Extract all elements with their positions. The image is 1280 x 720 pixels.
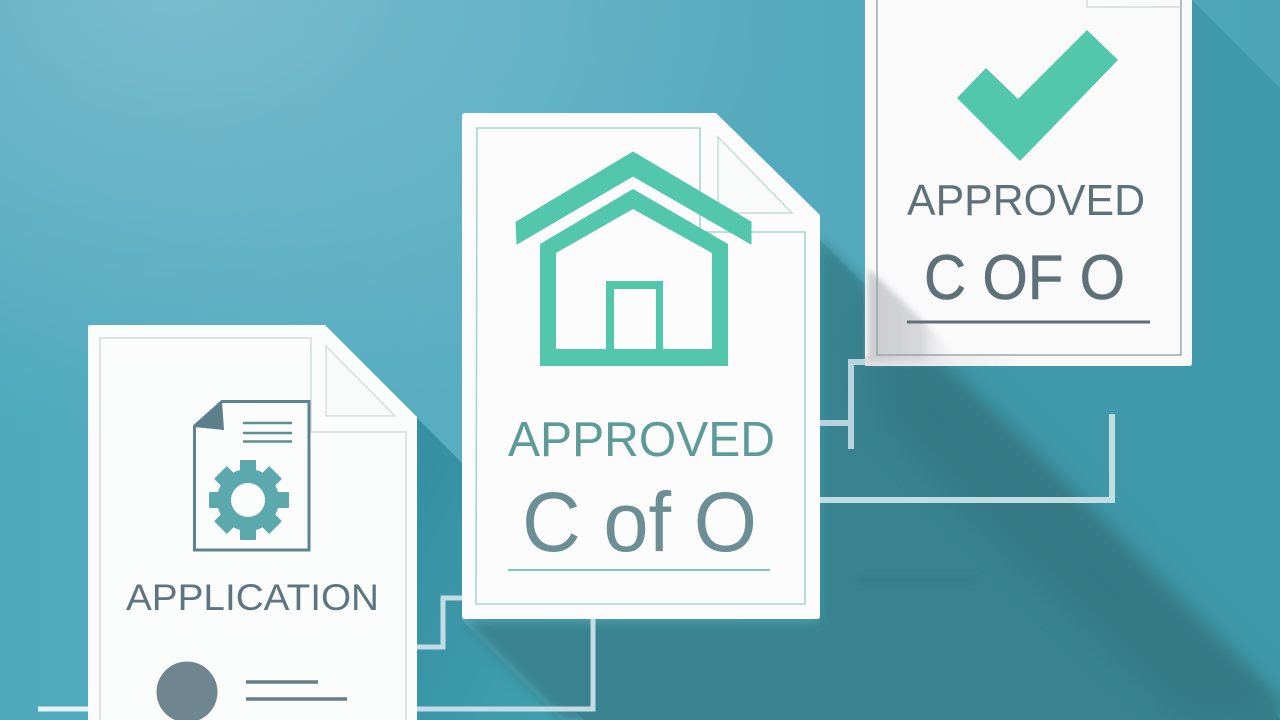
connector: C of O to approved step (818, 362, 868, 449)
connector: C of O to approved lower bracket (818, 414, 1112, 500)
bottom strip tint (865, 356, 1015, 366)
document sheet (865, 0, 1192, 366)
gear (209, 460, 289, 540)
long shadow of application document (417, 418, 562, 720)
faint smudge text on shadow (858, 576, 976, 585)
detail lines (246, 682, 347, 699)
small page outline (194, 402, 309, 550)
icon: check mark (957, 30, 1118, 161)
label: approved: APPROVED (907, 176, 1145, 225)
document sheet (88, 325, 417, 720)
label: C of O: C of O (522, 475, 757, 569)
label: approved: APPROVED (508, 413, 775, 467)
inner border (100, 338, 406, 720)
small page fold (194, 401, 224, 430)
folded corner (718, 137, 792, 213)
icon: profile circle (156, 662, 218, 720)
folded corner stub (1087, 0, 1181, 7)
underline (508, 569, 770, 571)
connector: left lead-in line (38, 706, 90, 712)
icon: document with gear (194, 401, 309, 550)
connector: application to C of O step (415, 598, 465, 647)
folded corner (326, 346, 395, 416)
icon: house (516, 152, 751, 366)
connector: application to C of O lower bracket (415, 615, 593, 709)
label: application: APPLICATION (126, 577, 379, 618)
shadow falling on sheet (868, 268, 962, 362)
inner border (877, 0, 1181, 355)
label: C OF O: C OF O (924, 243, 1125, 313)
long shadow of approved certificate (820, 0, 1280, 720)
panel: approved certificate document (865, 0, 1192, 366)
underline (907, 320, 1150, 324)
document sheet (462, 113, 820, 619)
panel: C of O document (462, 113, 820, 619)
inner border (476, 128, 805, 604)
small page text lines (243, 423, 292, 442)
long shadow of C of O document (462, 240, 1280, 720)
panel: application document (88, 325, 417, 720)
